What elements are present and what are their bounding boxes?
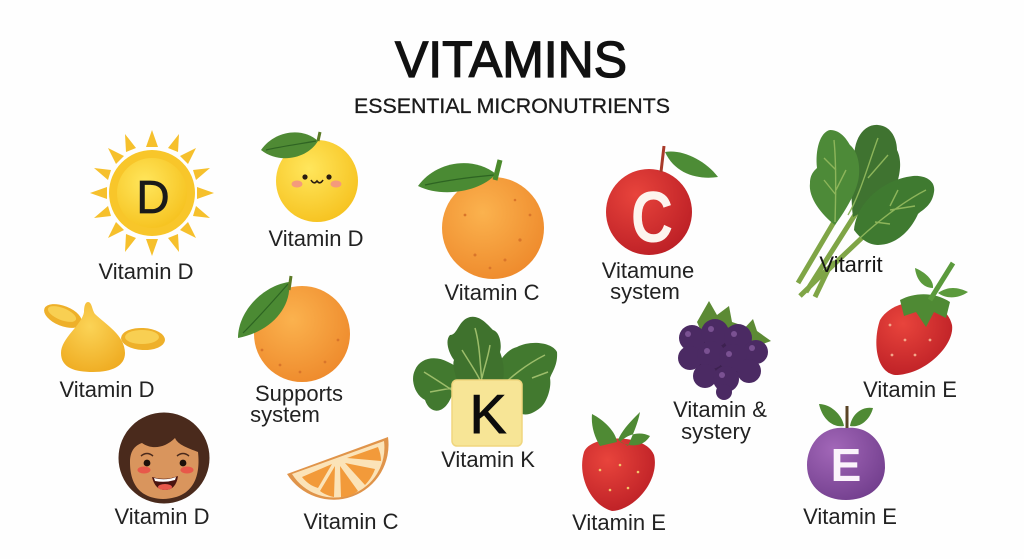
icon: purple plum E: [807, 404, 885, 500]
icon: strawberry bottom: [582, 412, 655, 511]
icon: sun with D: D: [136, 171, 170, 223]
icon: red apple C: C: [631, 178, 673, 258]
label: Vitamune system: Vitamune: [602, 258, 694, 283]
icon: strawberry right: [876, 263, 968, 375]
label: face Vitamin D: Vitamin D: [115, 504, 209, 529]
label: lemon Vitamin D: Vitamin D: [269, 226, 363, 251]
label: Vitamin & systery: [673, 397, 767, 444]
label: Supports system: Supports: [255, 381, 343, 406]
subtitle: ESSENTIAL MICRONUTRIENTS: [354, 95, 670, 118]
icon: smiling face: [118, 412, 210, 504]
label: pills Vitamin D: Vitamin D: [60, 377, 154, 402]
icon: orange with leaf 2: [238, 276, 350, 382]
icon: orange with leaf: [418, 160, 544, 279]
label: plum Vitamin E: Vitamin E: [803, 504, 897, 529]
label: Vitamune system: system: [610, 279, 680, 304]
label: strawberry Vitamin E: Vitamin E: [572, 510, 666, 535]
icon: smiling lemon: [261, 132, 358, 222]
label: Vitarrit: Vitarrit: [819, 252, 883, 277]
label: slice Vitamin C: Vitamin C: [304, 509, 399, 534]
title: VITAMINS: [395, 31, 627, 88]
icon: purple plum E: E: [831, 439, 861, 491]
label: Vitamin K: Vitamin K: [441, 447, 535, 472]
icon: berries: [678, 301, 771, 400]
label: Supports system: [250, 381, 343, 427]
label: Vitamune system: [602, 258, 694, 304]
label: orange Vitamin C: Vitamin C: [445, 280, 540, 305]
label: Vitamin & systery: systery: [681, 419, 751, 444]
icon: kale with K tile: [413, 317, 557, 446]
icon: orange slice: [287, 437, 389, 500]
label: sun Vitamin D: Vitamin D: [99, 259, 193, 284]
icon: kale with K tile: K: [470, 383, 507, 445]
icon: yellow pills: [41, 299, 166, 372]
label: Vitamin & systery: Vitamin &: [673, 397, 767, 422]
icon: sun with D: [90, 130, 214, 256]
label: Vitamin E right: Vitamin E: [863, 377, 957, 402]
icon: spinach bunch: [798, 125, 934, 297]
label: Supports system: system: [250, 402, 320, 427]
icon: red apple C: [606, 146, 718, 258]
